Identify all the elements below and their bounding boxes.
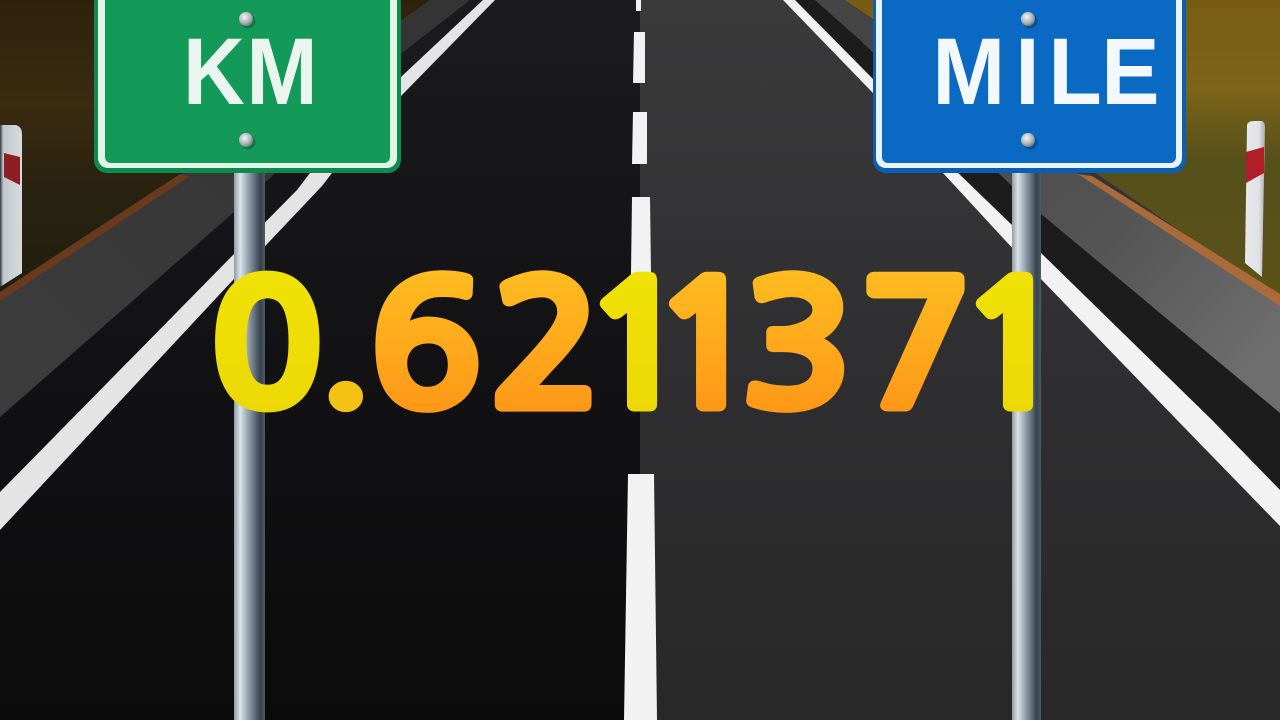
right road surface — [640, 0, 1280, 720]
conversion factor number: 2 — [489, 262, 604, 432]
conversion factor number: 7 — [859, 262, 974, 432]
MILE sign: MILE — [932, 19, 1160, 125]
left post — [0, 125, 22, 287]
right dark band — [783, 0, 1280, 490]
left road surface — [0, 0, 640, 720]
left pole — [234, 172, 265, 720]
conversion factor number: 1 — [956, 262, 1071, 432]
MILE sign — [873, 0, 1186, 173]
left shoulder edge — [0, 174, 190, 301]
conversion factor number: . — [316, 254, 373, 424]
conversion factor number: 1 — [580, 262, 695, 432]
conversion factor number: 0 — [209, 262, 324, 432]
background grass — [0, 0, 1280, 320]
right pole — [1012, 172, 1041, 720]
right shoulder — [815, 0, 1280, 413]
left shoulder — [0, 0, 470, 417]
conversion factor number: 3 — [740, 262, 855, 432]
KM sign — [94, 0, 401, 173]
centre dashes — [624, 0, 657, 720]
conversion factor number: 6 — [368, 262, 483, 432]
right post — [1245, 121, 1265, 277]
right shoulder edge — [1078, 174, 1280, 306]
KM sign: KM — [183, 19, 318, 125]
conversion factor number: 1 — [650, 262, 764, 432]
left edge line — [0, 0, 495, 530]
right edge line — [783, 0, 1280, 526]
